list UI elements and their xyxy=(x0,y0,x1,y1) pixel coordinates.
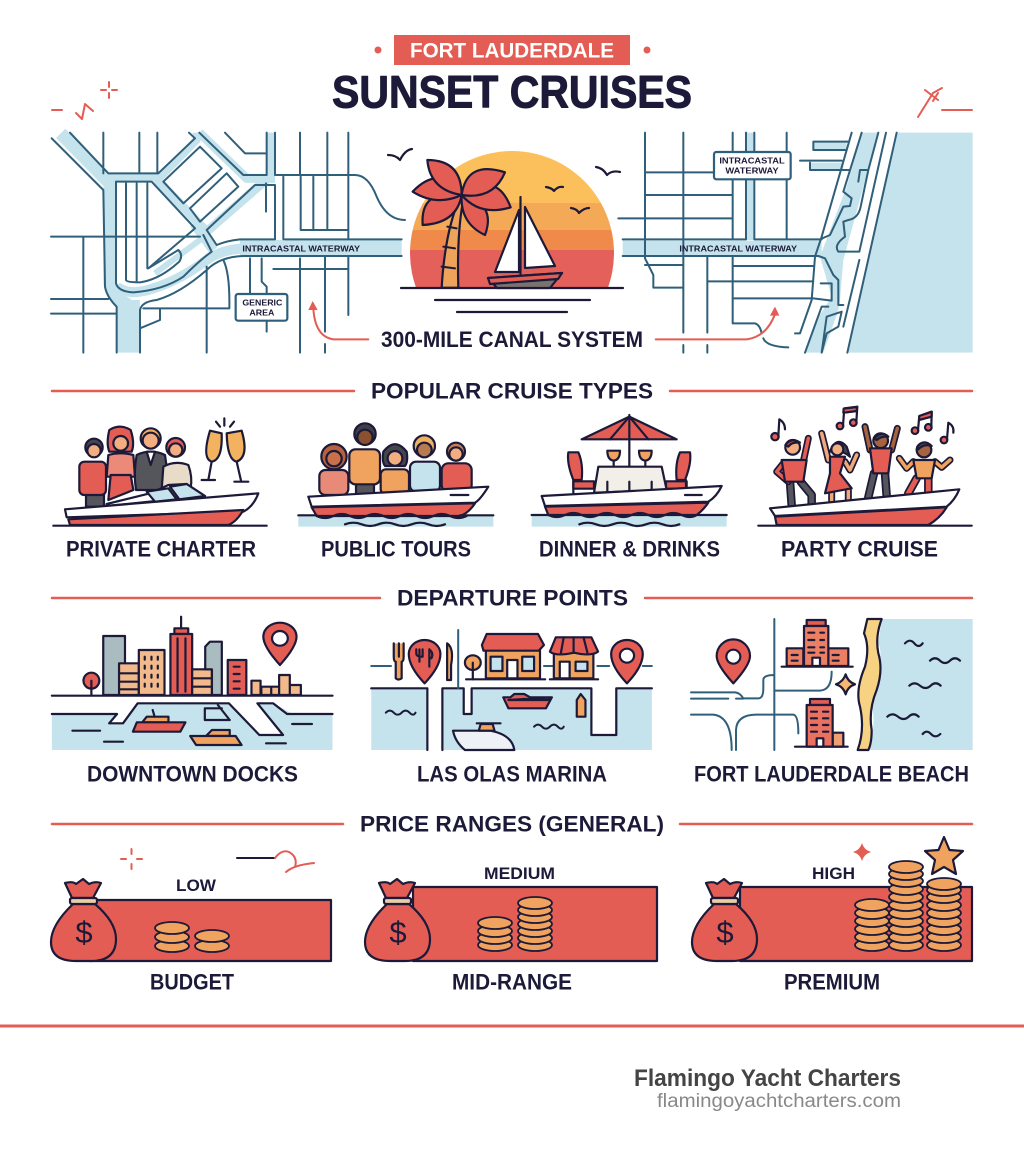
icon: star xyxy=(925,837,963,874)
sun bands xyxy=(405,148,619,288)
birds xyxy=(388,149,620,213)
panel: private charter xyxy=(53,418,267,562)
section heading: price ranges: PRICE RANGES (GENERAL) xyxy=(360,812,664,836)
label: premium: PREMIUM xyxy=(784,970,880,994)
footer rule xyxy=(0,1024,1024,1028)
icon: money bag xyxy=(365,879,430,961)
panel: public tours xyxy=(298,423,493,562)
bar: high xyxy=(740,887,972,961)
icon: money bag: $ xyxy=(75,915,93,950)
dancer 4 xyxy=(899,442,950,493)
label: PRIVATE CHARTER xyxy=(66,536,256,562)
label: Intracastal Waterway box: WATERWAY xyxy=(725,166,779,176)
sunset scene xyxy=(388,148,623,312)
footer brand: flamingoyachtcharters.com xyxy=(657,1091,901,1112)
icon: dining boat xyxy=(532,415,727,527)
section heading: popular cruise types: POPULAR CRUISE TYPES xyxy=(371,378,653,404)
icon: tour group on boat xyxy=(298,423,493,527)
horizon lines xyxy=(401,288,623,312)
dancer 3 xyxy=(865,427,897,497)
icon: hotel one xyxy=(782,620,853,667)
label: Generic Area: AREA xyxy=(249,308,274,318)
canal system caption: 300-MILE CANAL SYSTEM xyxy=(381,327,643,352)
panel: dinner and drinks xyxy=(532,415,727,562)
icon: beach map xyxy=(691,619,973,750)
icon: marina with shops xyxy=(371,630,652,750)
sparkle xyxy=(853,843,871,861)
title: SUNSET CRUISES xyxy=(332,66,692,118)
decoration: right sparkle xyxy=(918,88,972,117)
icon: money bag: $ xyxy=(389,915,407,950)
icon: location pin xyxy=(717,639,750,683)
banner: Fort Lauderdale xyxy=(374,35,650,65)
label: medium: MEDIUM xyxy=(484,864,555,883)
canal water left xyxy=(61,133,402,353)
bar: medium xyxy=(413,887,657,961)
panel: party cruise xyxy=(758,407,972,562)
ocean waves xyxy=(887,641,960,736)
icon: coins low xyxy=(155,922,229,952)
label: Generic Area xyxy=(236,294,287,321)
sailboat xyxy=(488,197,562,288)
map: right canal grid xyxy=(618,133,973,353)
canal outlines right xyxy=(618,133,897,353)
label: PUBLIC TOURS xyxy=(321,536,471,562)
palm tree xyxy=(413,160,511,288)
label: high: HIGH xyxy=(812,864,855,883)
map: left canal grid xyxy=(51,133,405,353)
panel: downtown docks xyxy=(52,617,332,786)
label: Intracastal Waterway box: INTRACASTAL xyxy=(719,156,785,166)
section heading: departure points: DEPARTURE POINTS xyxy=(397,586,628,610)
footer brand xyxy=(634,1065,901,1112)
icon: location pin xyxy=(611,640,643,683)
music notes xyxy=(771,407,953,443)
label: LAS OLAS MARINA xyxy=(417,762,607,786)
panel: fort lauderdale beach xyxy=(691,619,973,786)
icon: money bag xyxy=(692,879,757,961)
panel: mid-range xyxy=(365,864,657,994)
icon: downtown skyline and harbor xyxy=(52,617,332,750)
canal water right xyxy=(623,133,878,353)
label: mid-range: MID-RANGE xyxy=(452,970,572,994)
icon: coins medium xyxy=(478,897,552,951)
icon: charter group on boat xyxy=(53,427,267,526)
icon: location pin xyxy=(263,623,297,665)
icon: coin stacks xyxy=(855,861,961,951)
dancer 2 xyxy=(822,433,857,501)
icon: dancers on boat xyxy=(758,407,972,526)
icon: tree xyxy=(465,655,481,679)
canal outlines left xyxy=(51,133,405,353)
decoration: price sparkle xyxy=(121,849,142,869)
footer brand: Flamingo Yacht Charters xyxy=(634,1065,901,1092)
label: budget: BUDGET xyxy=(150,970,235,994)
icon: hotel two xyxy=(795,699,848,747)
label: Intracastal Waterway right: INTRACASTAL WATERWAY xyxy=(679,244,797,254)
label: Generic Area: GENERIC xyxy=(242,298,282,308)
decoration: price swoosh xyxy=(237,851,314,872)
icon: restaurant pin xyxy=(409,640,440,683)
label: DOWNTOWN DOCKS xyxy=(87,762,298,786)
party boat hull xyxy=(758,489,972,526)
icon: shop one xyxy=(466,634,545,679)
panel: premium xyxy=(692,837,972,994)
icon: shop two xyxy=(550,637,598,679)
label: low: LOW xyxy=(176,876,217,895)
header xyxy=(52,35,972,119)
panel: budget xyxy=(51,876,331,994)
banner: Fort Lauderdale: FORT LAUDERDALE xyxy=(410,40,614,62)
arrow: left canal callout xyxy=(308,301,368,339)
arrow: right canal callout xyxy=(656,307,779,339)
label: Intracastal Waterway: INTRACASTAL WATERWAY xyxy=(242,244,360,254)
label: Intracastal Waterway box xyxy=(714,152,791,179)
ocean xyxy=(847,133,973,353)
panel: las olas marina xyxy=(371,630,652,786)
icon: champagne glasses xyxy=(202,418,248,482)
icon: fork and knife xyxy=(394,643,452,680)
label: DINNER & DRINKS xyxy=(539,536,720,562)
decoration: left sparkle xyxy=(52,82,117,119)
icon: money bag xyxy=(51,879,116,961)
diamond sparkle xyxy=(836,674,855,694)
dancer 1 xyxy=(777,438,812,505)
label: FORT LAUDERDALE BEACH xyxy=(694,762,969,786)
label: PARTY CRUISE xyxy=(781,536,938,562)
bar: low xyxy=(90,900,331,961)
icon: money bag: $ xyxy=(716,915,734,950)
